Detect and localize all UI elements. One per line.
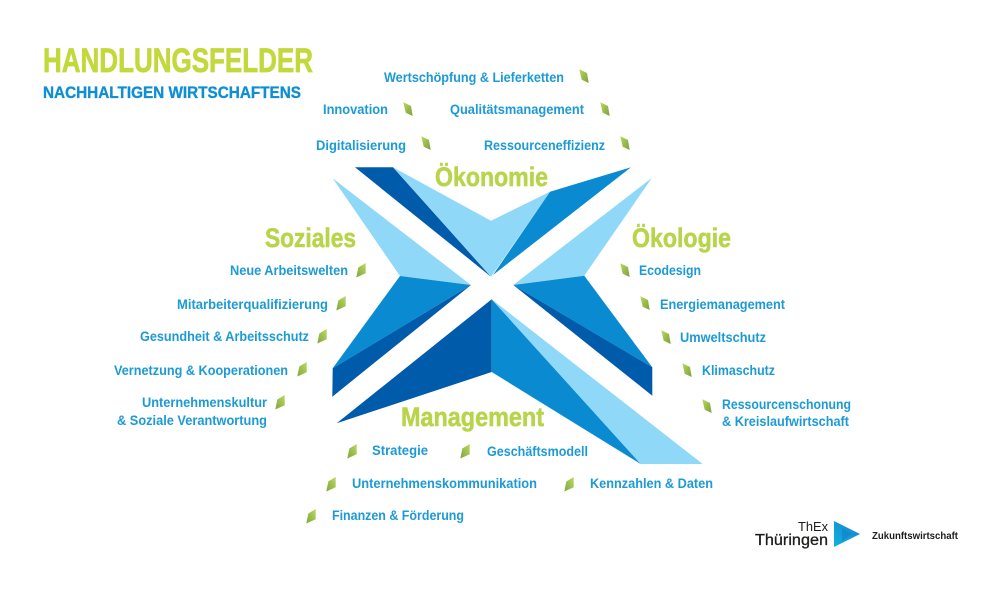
item: Innovation: Innovation [323, 102, 388, 117]
item: Klimaschutz: Klimaschutz [702, 363, 775, 378]
logo tagline: Zukunftswirtschaft [872, 530, 958, 542]
logo: ThEx Thüringen [755, 520, 860, 549]
heading: Ökologie: Ökologie [632, 223, 731, 253]
item: Gesundheit & Arbeitsschutz: Gesundheit & Arbeitsschutz [140, 329, 309, 344]
item: Ressourceneffizienz: Ressourceneffizienz [484, 138, 605, 153]
list: Management topics [306, 443, 713, 524]
icon: logo triangle [834, 521, 860, 547]
item: Digitalisierung: Digitalisierung [316, 138, 406, 153]
item: Strategie: Strategie [372, 443, 428, 458]
logo: ThEx Thüringen: Thüringen [755, 532, 828, 549]
list: Ökologie topics [620, 263, 851, 429]
diagram: cross of four arrows [332, 167, 703, 464]
arrow: Ökologie [513, 178, 652, 396]
item: Geschäftsmodell: Geschäftsmodell [487, 444, 588, 459]
arrow: Soziales [332, 178, 471, 397]
item: Unternehmenskultur & Soziale Verantwortung: & Soziale Verantwortung [117, 413, 267, 428]
item: Unternehmenskultur & Soziale Verantwortung: Unternehmenskultur [142, 395, 268, 410]
arrow: Ökonomie [355, 167, 631, 277]
item: Mitarbeiterqualifizierung: Mitarbeiterqualifizierung [177, 297, 328, 312]
item: Kennzahlen & Daten: Kennzahlen & Daten [590, 476, 713, 491]
logo: ThEx Thüringen: ThEx [798, 520, 829, 534]
item: Strategie [347, 443, 428, 458]
list: Soziales topics [114, 263, 366, 428]
item: Ressourcenschonung & Kreislaufwirtschaft: & Kreislaufwirtschaft [722, 414, 849, 429]
heading: Soziales: Soziales [265, 223, 356, 253]
item: Ecodesign: Ecodesign [639, 263, 701, 278]
item: Energiemanagement: Energiemanagement [660, 297, 785, 312]
item: Finanzen & Förderung: Finanzen & Förderung [332, 508, 464, 523]
item: Ressourcenschonung & Kreislaufwirtschaft: Ressourcenschonung [722, 397, 851, 412]
item: Unternehmenskommunikation: Unternehmenskommunikation [352, 476, 537, 491]
item: Neue Arbeitswelten: Neue Arbeitswelten [230, 263, 348, 278]
item: Vernetzung & Kooperationen: Vernetzung & Kooperationen [114, 363, 288, 378]
item: Qualitätsmanagement: Qualitätsmanagement [450, 102, 584, 117]
subtitle: NACHHALTIGEN WIRTSCHAFTENS [43, 84, 301, 102]
arrow: Management [337, 299, 703, 464]
list: Ökonomie topics [316, 69, 630, 153]
title: HANDLUNGSFELDER [43, 42, 313, 80]
item: Umweltschutz: Umweltschutz [680, 330, 766, 345]
item: Wertschöpfung & Lieferketten: Wertschöpfung & Lieferketten [384, 70, 564, 85]
item: Ressourcenschonung & Kreislaufwirtschaft [702, 397, 851, 429]
heading: Ökonomie: Ökonomie [435, 162, 548, 192]
heading: Management: Management [401, 402, 544, 432]
item: Unternehmenskultur & Soziale Verantwortung [117, 395, 285, 428]
